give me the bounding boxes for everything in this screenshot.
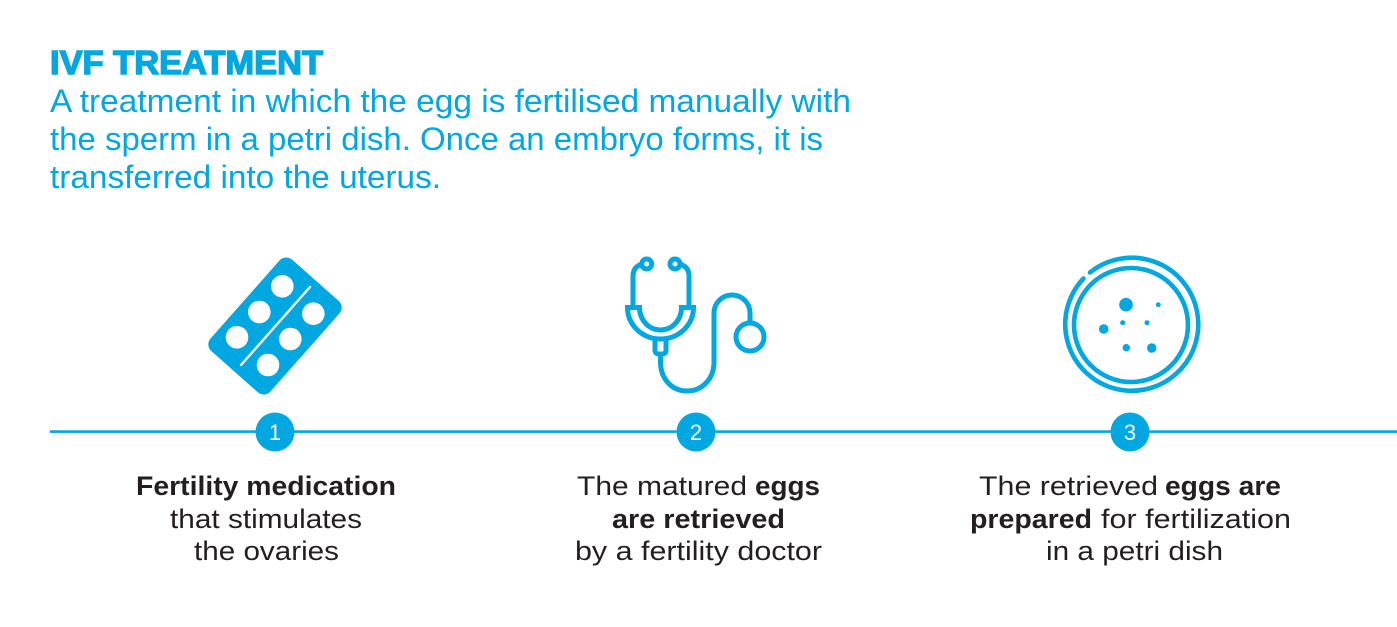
step 2 text: are retrieved (612, 504, 785, 534)
step 1 text: the ovaries (194, 536, 339, 566)
step 3 marker (1110, 412, 1150, 452)
step 3 text: for fertilization (1101, 504, 1291, 534)
step 1 marker (256, 412, 294, 452)
step 1 text (136, 471, 396, 566)
step 3 text: The retrieved (979, 471, 1158, 501)
step 2 text: by a fertility doctor (575, 536, 822, 566)
step 1 text: Fertility medication (136, 471, 396, 501)
title: IVF TREATMENT (50, 44, 323, 81)
icon: stethoscope (628, 259, 764, 391)
step 2 text (575, 471, 822, 566)
step 3 text: in a petri dish (1046, 536, 1223, 566)
step 3 marker: 3 (1124, 420, 1136, 445)
icon: petri dish (1065, 258, 1198, 391)
intro text block (50, 83, 851, 195)
intro text block: transferred into the uterus. (50, 159, 441, 195)
timeline line (50, 430, 1397, 433)
step 2 marker (676, 412, 716, 452)
intro text block: A treatment in which the egg is fertilised manually with (50, 83, 851, 119)
step 2 marker: 2 (690, 420, 702, 445)
step 3 text: eggs are (1165, 471, 1281, 501)
step 3 text: prepared (970, 504, 1092, 534)
step 3 text (970, 471, 1291, 566)
step 1 marker: 1 (269, 420, 281, 445)
step 1 text: that stimulates (170, 504, 362, 534)
intro text block: the sperm in a petri dish. Once an embryo forms, it is (50, 121, 823, 157)
step 2 text: eggs (755, 471, 820, 501)
icon: blister pack of pills (205, 254, 345, 398)
step 2 text: The matured (577, 471, 747, 501)
